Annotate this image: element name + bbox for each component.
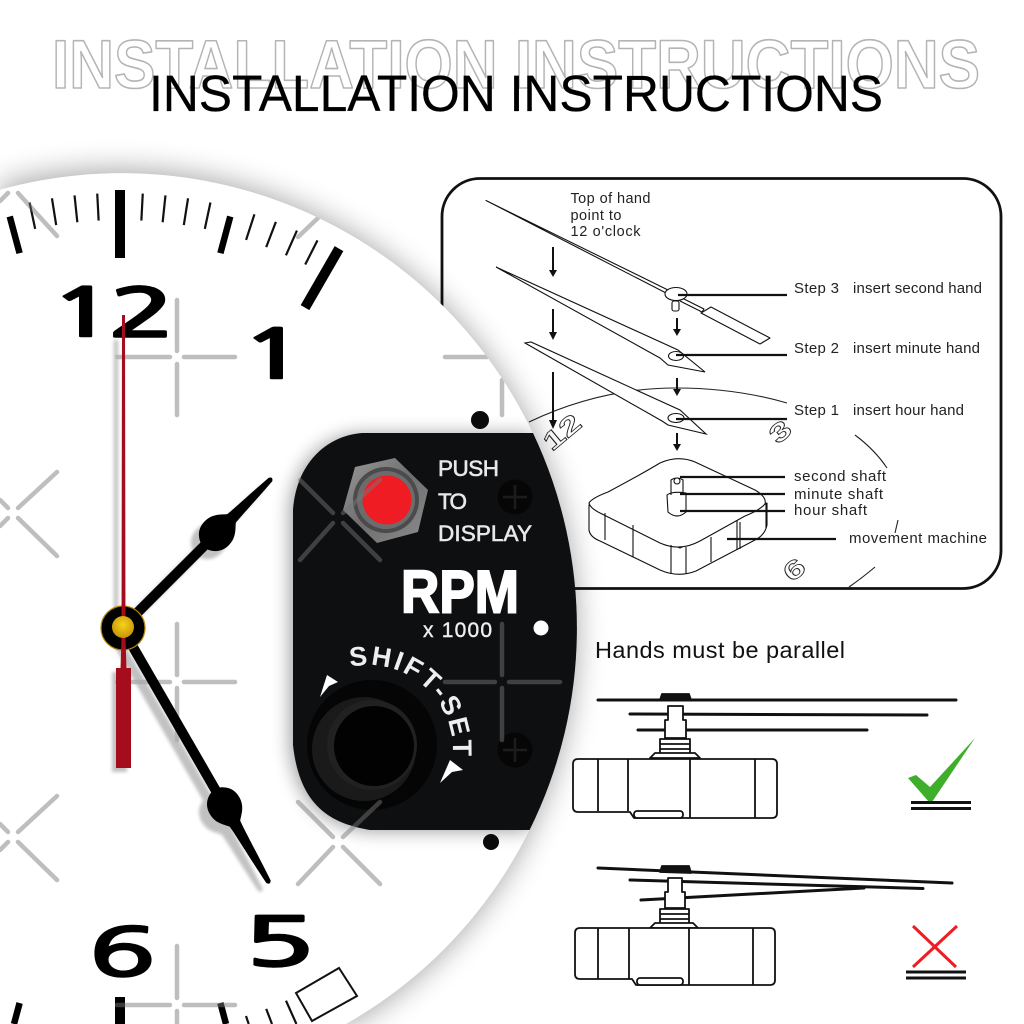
hand cap xyxy=(660,694,691,700)
step labels: hour shaft xyxy=(794,502,868,519)
leader lines xyxy=(676,295,836,539)
step labels: minute shaft xyxy=(794,486,884,503)
dial disc xyxy=(0,173,577,1024)
x 1000 label: x 1000 xyxy=(423,619,492,642)
solid title: INSTALLATION INSTRUCTIONS xyxy=(149,65,883,122)
second hand xyxy=(116,315,131,768)
minute ticks xyxy=(30,194,317,1024)
clock shadow xyxy=(0,171,576,1024)
top of hand note: point to xyxy=(570,208,622,224)
module body xyxy=(293,433,577,830)
minute hand xyxy=(496,267,705,372)
screws xyxy=(498,480,532,768)
numerals xyxy=(48,280,316,988)
diagram: incorrect tilted hands xyxy=(575,866,952,985)
heading: hands must be parallel: Hands must be parallel xyxy=(595,637,845,663)
hour hand xyxy=(525,342,706,434)
quarter ticks xyxy=(10,217,230,1024)
movement machine xyxy=(589,459,767,574)
push to display label xyxy=(438,456,532,546)
movement body xyxy=(573,759,777,818)
push to display label: TO xyxy=(438,489,467,514)
minute hand xyxy=(107,620,284,892)
movement body xyxy=(575,928,775,985)
dial numerals: 3 xyxy=(763,414,797,449)
rpm label: RPM xyxy=(401,558,519,626)
icon: green check xyxy=(908,738,975,808)
step labels: movement machine xyxy=(849,530,987,547)
panel: assembly steps diagram xyxy=(442,178,1001,588)
stem xyxy=(660,878,689,923)
step labels: Step 2 xyxy=(794,340,839,357)
step labels: Step 3 xyxy=(794,280,839,297)
dial numerals xyxy=(537,408,811,587)
push to display label: PUSH xyxy=(438,456,499,481)
step labels xyxy=(794,280,987,547)
watermark crosses xyxy=(0,193,560,1024)
tilted hand lines xyxy=(598,868,952,900)
push button xyxy=(343,458,428,543)
hour hand xyxy=(110,466,284,640)
dial numerals: 6 xyxy=(777,552,811,587)
dial numerals: 12 xyxy=(537,408,587,456)
knob xyxy=(307,680,437,810)
parallel hand lines xyxy=(598,700,956,730)
title xyxy=(52,26,980,122)
rpm module xyxy=(293,433,577,830)
second hand xyxy=(486,200,770,344)
stem xyxy=(660,706,690,753)
hand cap xyxy=(660,866,691,873)
step labels: second shaft xyxy=(794,468,887,485)
step labels: insert hour hand xyxy=(853,402,964,419)
top of hand note xyxy=(570,191,650,240)
top of hand note: 12 o'clock xyxy=(570,224,641,240)
faint dial arcs xyxy=(529,388,898,587)
rpm module shadow xyxy=(290,434,574,831)
panel border xyxy=(442,178,1001,588)
knob arrows xyxy=(320,675,463,783)
step labels: insert second hand xyxy=(853,280,982,297)
indicator dot xyxy=(534,620,548,636)
hour ticks xyxy=(120,190,339,1024)
down arrows xyxy=(549,247,681,451)
push to display label: DISPLAY xyxy=(438,521,532,546)
date window xyxy=(296,968,357,1021)
step labels: Step 1 xyxy=(794,402,839,419)
numerals: 1 xyxy=(239,323,309,390)
module dots xyxy=(471,411,499,850)
diagram: correct parallel hands xyxy=(573,694,956,818)
icon: red cross xyxy=(906,926,966,978)
clock hands shadows xyxy=(99,340,276,900)
numerals: 5 xyxy=(242,910,316,977)
hub xyxy=(101,315,145,768)
numerals: 6 xyxy=(88,921,157,988)
flange xyxy=(650,923,698,928)
clock face xyxy=(0,173,577,1024)
flange xyxy=(650,753,700,758)
top of hand note: Top of hand xyxy=(570,191,650,207)
step labels: insert minute hand xyxy=(853,340,980,357)
numerals: 12 xyxy=(48,280,167,348)
shift-set label: SHIFT-SET xyxy=(350,646,472,756)
